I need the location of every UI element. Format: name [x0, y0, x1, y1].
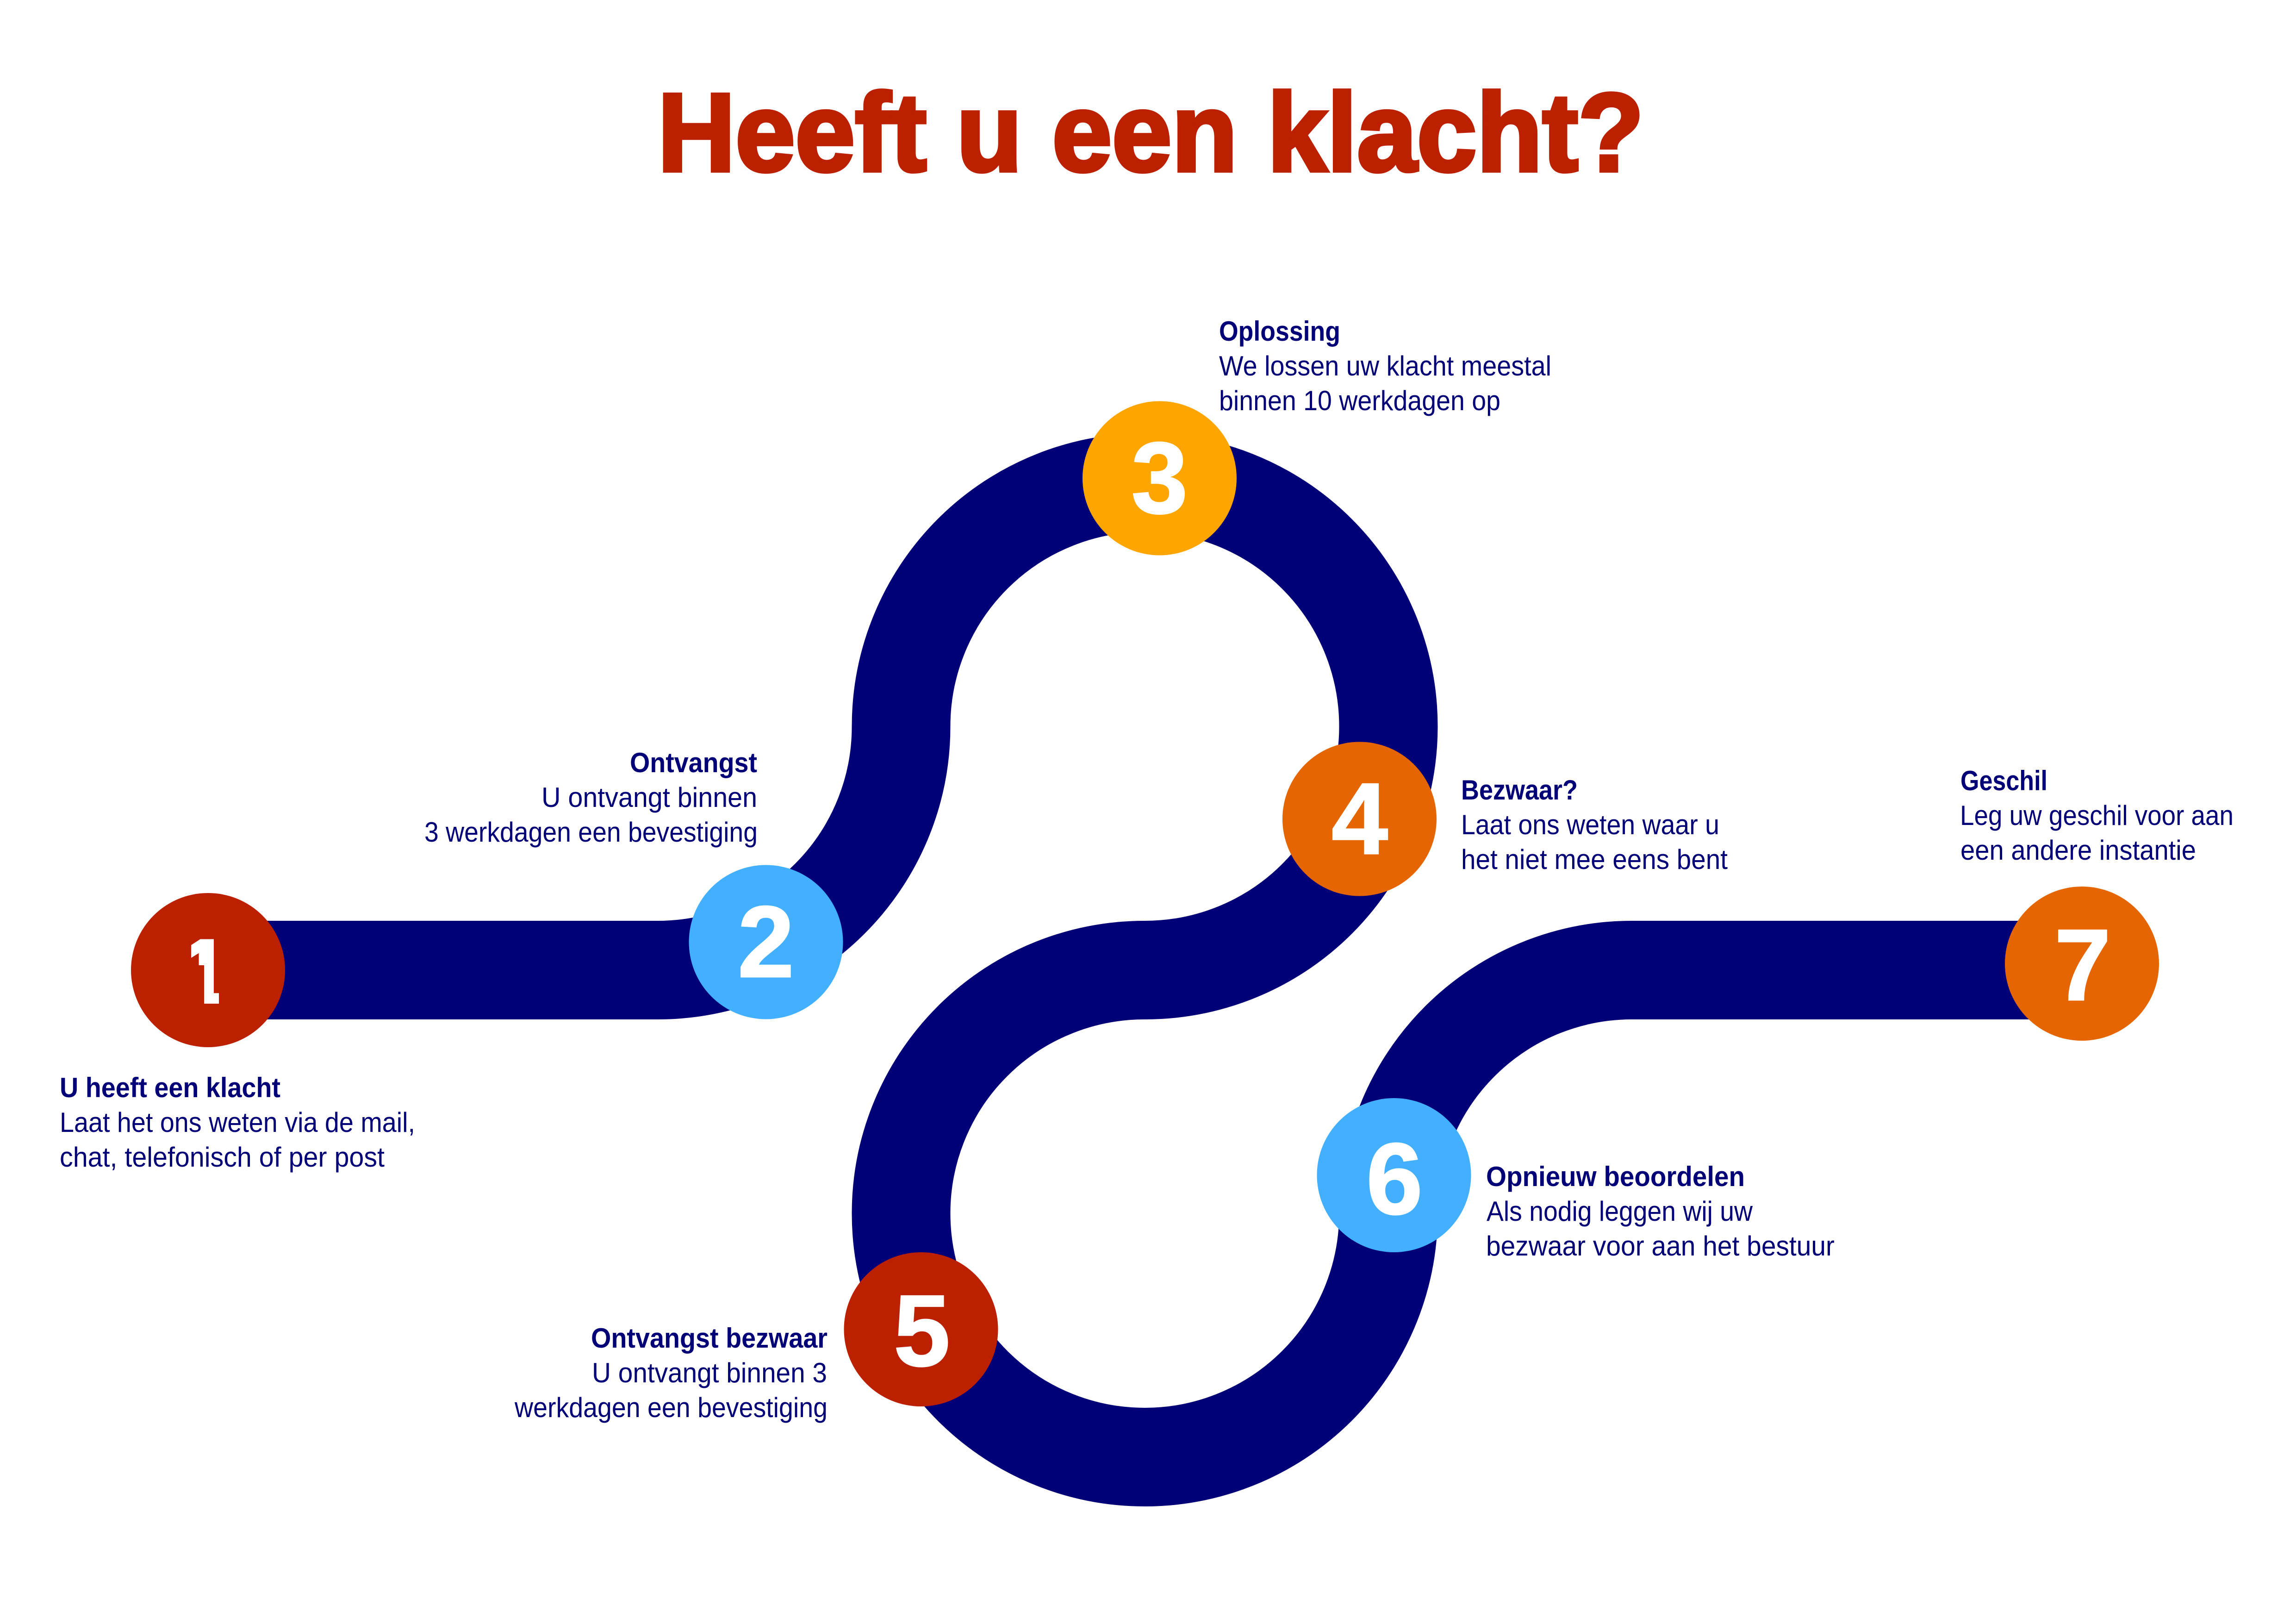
step 6 marker: 6	[1366, 1123, 1423, 1236]
text block: step 5: Ontvangst bezwaar	[591, 1323, 828, 1354]
step 4 marker: 4	[1332, 762, 1388, 875]
step 6 marker	[1317, 1098, 1471, 1252]
text block: step 1	[60, 1072, 415, 1173]
text block: step 6: bezwaar voor aan het bestuur	[1486, 1230, 1835, 1262]
text block: step 4: het niet mee eens bent	[1461, 844, 1728, 875]
step 1 marker	[131, 893, 285, 1047]
text block: step 6: Als nodig leggen wij uw	[1487, 1196, 1753, 1227]
text block: step 5: werkdagen een bevestiging	[514, 1392, 828, 1423]
text block: step 6: Opnieuw beoordelen	[1486, 1161, 1745, 1192]
text block: step 7: Leg uw geschil voor aan	[1960, 800, 2234, 831]
step 5 marker: 5	[894, 1274, 950, 1387]
text block: step 1: Laat het ons weten via de mail,	[60, 1107, 415, 1138]
text block: step 2: 3 werkdagen een bevestiging	[424, 817, 758, 848]
text block: step 7: een andere instantie	[1960, 835, 2196, 866]
text block: step 7: Geschil	[1960, 765, 2047, 796]
step 5 marker	[844, 1252, 998, 1406]
text block: step 2: Ontvangst	[630, 747, 757, 778]
text block: step 3: We lossen uw klacht meestal	[1219, 350, 1551, 381]
step 2 marker: 2	[738, 886, 794, 999]
text block: step 5: U ontvangt binnen 3	[592, 1357, 827, 1388]
text block: step 7	[1960, 765, 2234, 866]
text block: step 6	[1486, 1161, 1835, 1262]
winding route track	[208, 482, 2082, 1457]
text block: step 4: Bezwaar?	[1461, 775, 1578, 806]
step 7 marker	[2005, 887, 2159, 1041]
step 3 marker	[1083, 401, 1237, 556]
step 1 marker: 1	[179, 921, 230, 1024]
text block: step 4: Laat ons weten waar u	[1461, 809, 1719, 840]
title: Heeft u een klacht?	[658, 70, 1644, 194]
text block: step 2	[424, 747, 758, 848]
text block: step 3: binnen 10 werkdagen op	[1219, 385, 1500, 416]
step 7 marker: 7	[2054, 909, 2111, 1022]
step 2 marker	[689, 865, 843, 1019]
text block: step 5	[514, 1323, 828, 1423]
text block: step 1: chat, telefonisch of per post	[60, 1142, 385, 1173]
text block: step 4	[1461, 775, 1728, 875]
step 4 marker	[1282, 742, 1437, 896]
step 3 marker: 3	[1132, 422, 1188, 535]
text block: step 2: U ontvangt binnen	[541, 782, 757, 813]
text block: step 1: U heeft een klacht	[60, 1072, 280, 1103]
text block: step 3: Oplossing	[1219, 316, 1340, 347]
text block: step 3	[1219, 316, 1551, 416]
